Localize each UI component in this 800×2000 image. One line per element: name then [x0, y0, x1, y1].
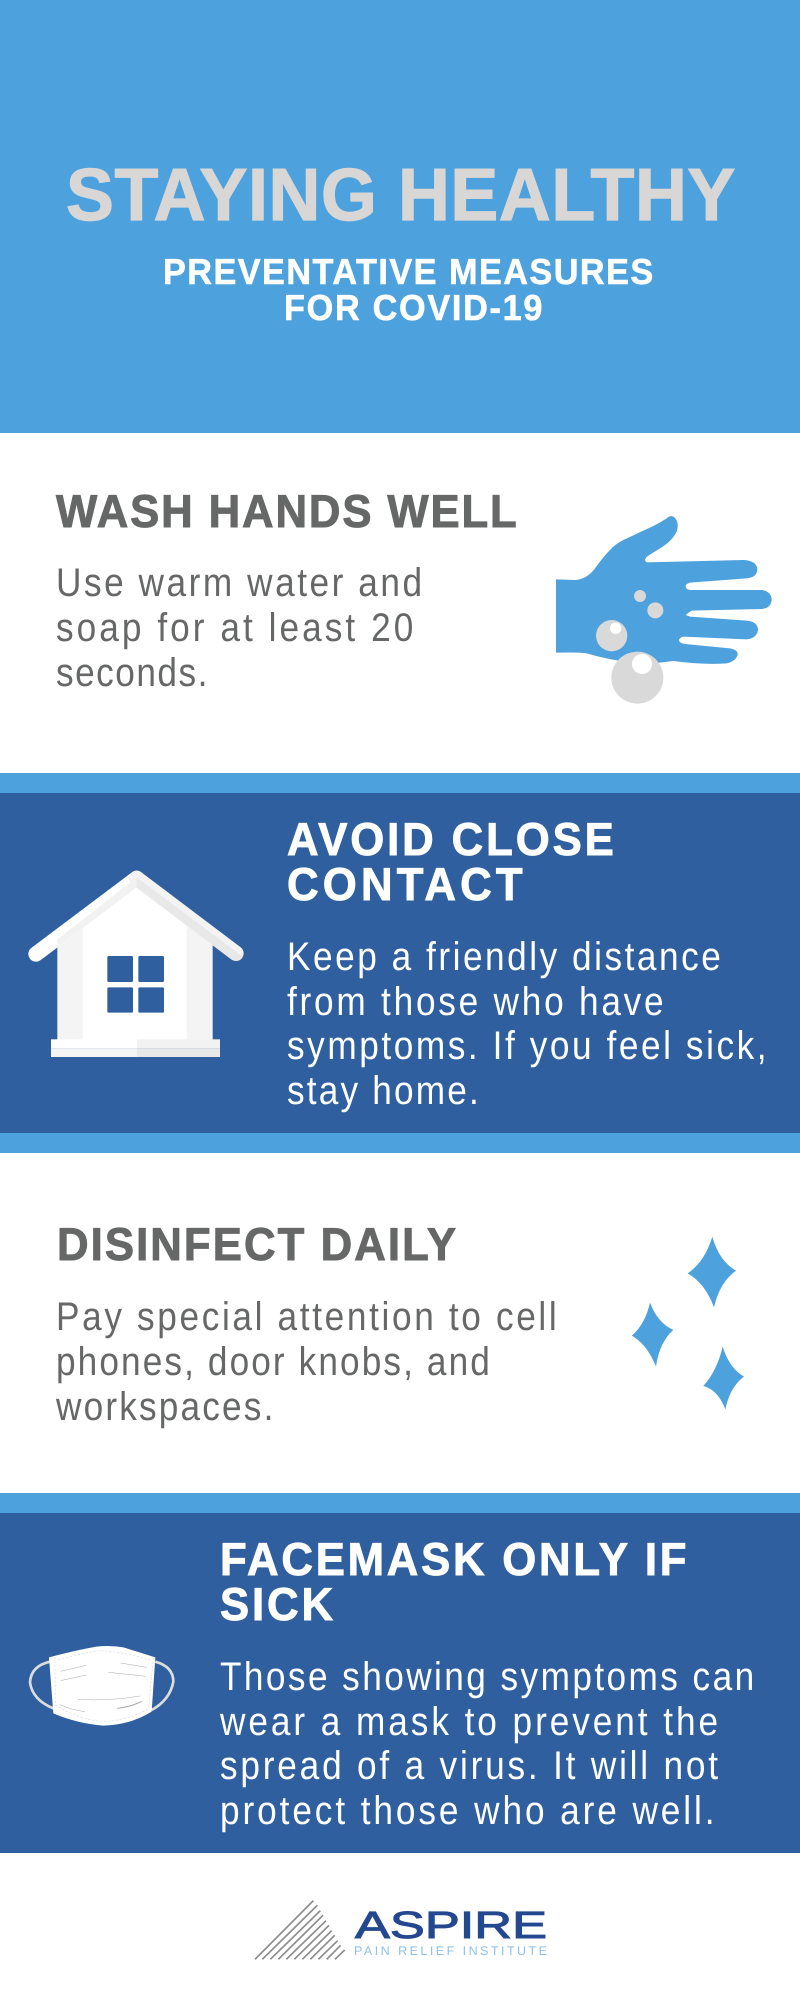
logo tagline: PAIN RELIEF INSTITUTE — [354, 1944, 547, 1958]
panel: facemask only if sick — [0, 1513, 800, 1853]
icon: soapy hand — [556, 516, 772, 704]
body text: Pay special attention to cell — [56, 1295, 557, 1339]
heading — [287, 813, 614, 910]
body text: Keep a friendly distance — [287, 935, 721, 979]
icon: sparkles — [632, 1237, 744, 1409]
body text — [219, 1655, 754, 1833]
panel: avoid close contact — [0, 793, 800, 1133]
body text — [287, 935, 767, 1113]
heading: DISINFECT DAILY — [57, 1218, 456, 1270]
subtitle — [163, 251, 653, 328]
icon: face mask — [30, 1646, 173, 1726]
body text: protect those who are well. — [220, 1789, 715, 1833]
heading: AVOID CLOSE — [287, 813, 614, 865]
heading: SICK — [220, 1578, 333, 1630]
body text: phones, door knobs, and — [56, 1340, 490, 1384]
logo wordmark: ASPIRE — [355, 1905, 547, 1947]
stripe: light blue divider — [0, 773, 800, 793]
body text: from those who have — [287, 980, 664, 1024]
logo mark: diagonal lines — [255, 1901, 345, 1959]
heading: FACEMASK ONLY IF — [220, 1533, 686, 1585]
body text — [55, 1295, 557, 1429]
stripe: light blue divider — [0, 1493, 800, 1513]
body text — [56, 561, 422, 695]
title: STAYING HEALTHY — [66, 153, 735, 236]
stripe: light blue divider — [0, 1133, 800, 1153]
heading — [220, 1533, 686, 1630]
heading: WASH HANDS WELL — [56, 485, 517, 537]
panel: disinfect daily — [55, 1218, 744, 1429]
body text: spread of a virus. It will not — [220, 1744, 718, 1788]
heading: CONTACT — [287, 858, 523, 910]
subtitle: PREVENTATIVE MEASURES — [163, 251, 653, 292]
body text: seconds. — [56, 651, 207, 695]
subtitle: FOR COVID-19 — [284, 287, 542, 328]
panel: wash hands well — [56, 485, 772, 704]
panel: header — [0, 0, 800, 433]
body text: stay home. — [287, 1069, 479, 1113]
body text: Those showing symptoms can — [220, 1655, 754, 1699]
body text: Use warm water and — [56, 561, 422, 605]
icon: house — [36, 877, 243, 1057]
body text: symptoms. If you feel sick, — [287, 1024, 767, 1068]
body text: soap for at least 20 — [56, 606, 413, 650]
logo: Aspire Pain Relief Institute — [255, 1901, 547, 1959]
body text: workspaces. — [55, 1385, 273, 1429]
body text: wear a mask to prevent the — [219, 1700, 718, 1744]
